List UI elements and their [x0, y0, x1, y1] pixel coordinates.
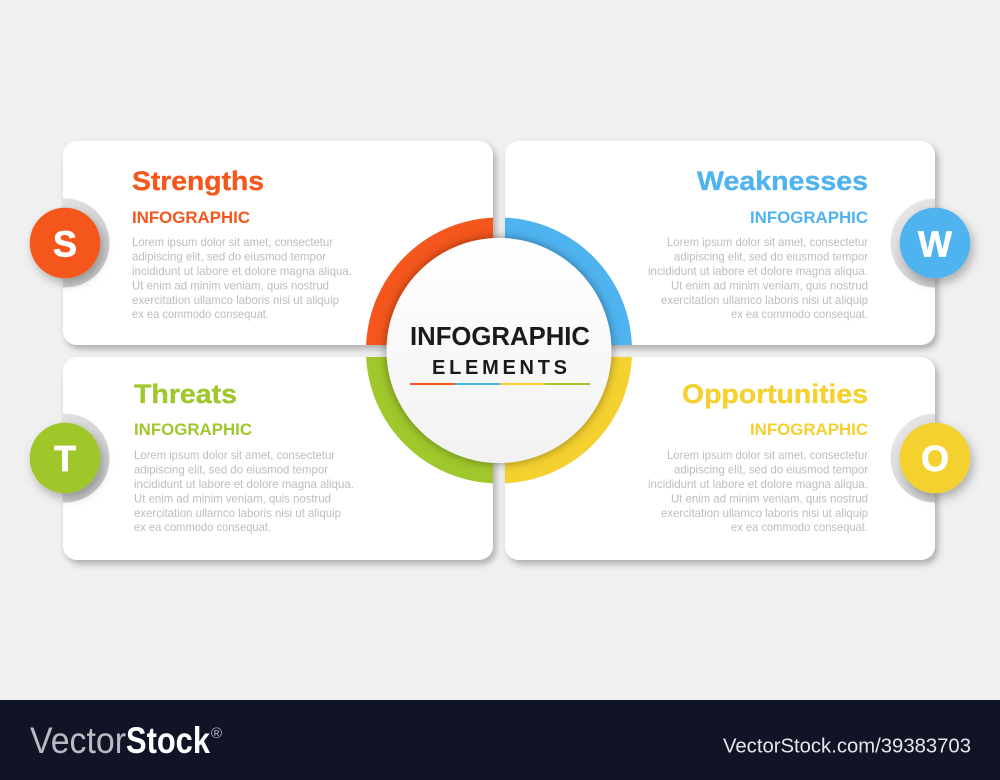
ring segment: orange: [366, 218, 493, 345]
multicolor underline: [410, 383, 590, 385]
text block: strengths: ex ea commodo consequat.: [132, 307, 269, 321]
text block: weaknesses: ex ea commodo consequat.: [731, 307, 868, 321]
text block: threats: [134, 379, 354, 534]
text block: weaknesses: Weaknesses: [697, 166, 868, 196]
text block: threats: Lorem ipsum dolor sit amet, consectetur: [134, 448, 335, 462]
text block: opportunities: Lorem ipsum dolor sit amet, consectetur: [667, 448, 868, 462]
panel: threats card: [20, 357, 493, 560]
text block: threats: Ut enim ad minim veniam, quis nostrud: [134, 492, 331, 506]
text block: strengths: incididunt ut labore et dolore magna aliqua.: [132, 264, 352, 278]
text block: opportunities: Ut enim ad minim veniam, quis nostrud: [671, 492, 868, 506]
text block: opportunities: adipiscing elit, sed do eiusmod tempor: [674, 462, 868, 476]
text block: strengths: Strengths: [132, 166, 264, 196]
image id: VectorStock.com/39383703: [723, 736, 971, 758]
text block: opportunities: Opportunities: [682, 379, 868, 409]
text block: weaknesses: [648, 166, 868, 321]
text block: opportunities: INFOGRAPHIC: [750, 420, 868, 439]
text block: threats: incididunt ut labore et dolore magna aliqua.: [134, 477, 354, 491]
text block: weaknesses: incididunt ut labore et dolore magna aliqua.: [648, 264, 868, 278]
ring segment: green: [366, 357, 493, 483]
icon: W badge: [900, 208, 970, 278]
text block: weaknesses: Lorem ipsum dolor sit amet, consectetur: [667, 235, 868, 249]
center title: INFOGRAPHIC: [410, 323, 590, 351]
icon: O badge: O: [921, 438, 949, 479]
center ring: [366, 218, 632, 483]
text block: threats: exercitation ullamco laboris nisi ut aliquip: [134, 506, 341, 520]
logo: Stock: [126, 720, 210, 761]
icon: O badge: [900, 423, 970, 493]
ring segment: blue: [505, 218, 632, 345]
panel: strengths card: [20, 141, 493, 345]
panel: opportunities card: [505, 357, 980, 560]
text block: opportunities: exercitation ullamco laboris nisi ut aliquip: [661, 506, 868, 520]
icon: S badge: [30, 208, 100, 278]
logo: [30, 720, 222, 761]
center circle: [386, 238, 612, 463]
footer bar: [0, 700, 1000, 780]
text block: strengths: adipiscing elit, sed do eiusmod tempor: [132, 250, 326, 264]
text block: strengths: [132, 166, 352, 321]
text block: opportunities: [648, 379, 868, 534]
text block: threats: ex ea commodo consequat.: [134, 520, 271, 534]
text block: threats: INFOGRAPHIC: [134, 420, 252, 439]
panel: weaknesses card: [505, 141, 980, 345]
text block: opportunities: incididunt ut labore et dolore magna aliqua.: [648, 477, 868, 491]
logo: ®: [211, 725, 222, 742]
text block: weaknesses: adipiscing elit, sed do eiusmod tempor: [674, 250, 868, 264]
icon: T badge: T: [54, 438, 76, 479]
text block: strengths: Ut enim ad minim veniam, quis nostrud: [132, 278, 329, 292]
text block: strengths: Lorem ipsum dolor sit amet, consectetur: [132, 235, 333, 249]
text block: strengths: INFOGRAPHIC: [132, 208, 250, 227]
icon: W badge: W: [918, 224, 952, 264]
text block: threats: Threats: [134, 379, 237, 409]
center title: [410, 323, 590, 385]
ring segment: yellow: [505, 357, 632, 483]
text block: threats: adipiscing elit, sed do eiusmod tempor: [134, 462, 328, 476]
icon: T badge: [30, 423, 100, 493]
text block: weaknesses: INFOGRAPHIC: [750, 208, 868, 227]
text block: opportunities: ex ea commodo consequat.: [731, 520, 868, 534]
text block: weaknesses: exercitation ullamco laboris nisi ut aliquip: [661, 293, 868, 307]
center title: ELEMENTS: [432, 357, 567, 379]
logo: Vector: [30, 720, 126, 761]
text block: weaknesses: Ut enim ad minim veniam, quis nostrud: [671, 278, 868, 292]
icon: S badge: S: [53, 224, 77, 264]
text block: strengths: exercitation ullamco laboris nisi ut aliquip: [132, 293, 339, 307]
